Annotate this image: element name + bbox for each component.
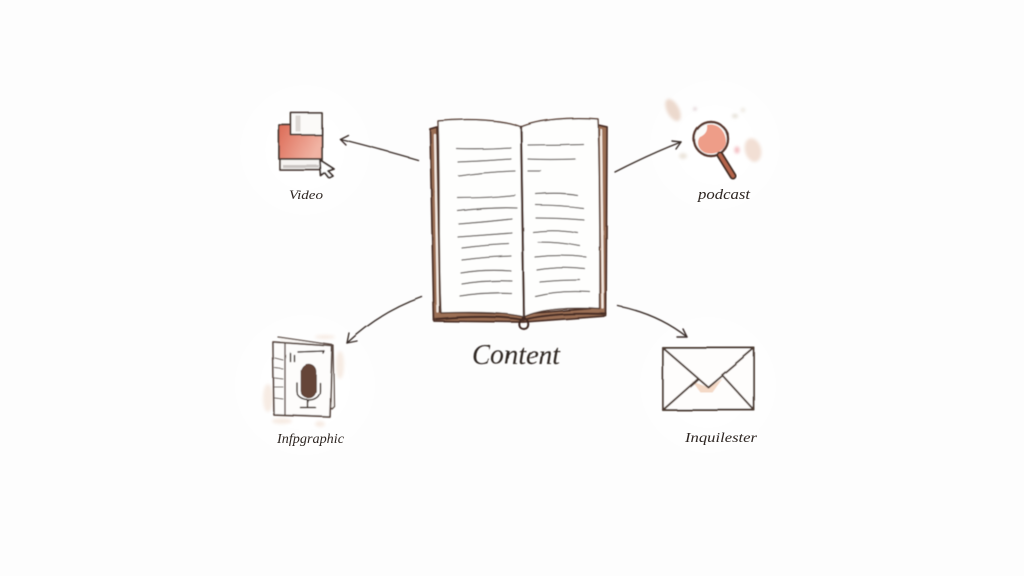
arrow: book to podcast <box>615 141 681 172</box>
arrow: book to newsletter <box>618 306 687 337</box>
label: Infographic: Infpgraphic <box>276 432 345 447</box>
icon: infographic booklet with microphone <box>263 335 344 427</box>
arrow: book to video <box>340 135 418 160</box>
icon: envelope <box>663 348 754 410</box>
book spine <box>521 127 524 318</box>
microphone <box>301 364 316 398</box>
left page text lines <box>457 148 517 296</box>
right page text lines <box>528 144 590 296</box>
icon: video <box>279 113 334 178</box>
central open book <box>430 118 607 329</box>
arrow: book to infographic <box>347 297 422 343</box>
book pages <box>438 118 600 317</box>
book cover <box>430 125 607 322</box>
splashes <box>662 97 764 164</box>
label: podcast: podcast <box>697 187 751 203</box>
cursor <box>320 160 334 178</box>
label: newsletter: Inquilester <box>684 431 758 446</box>
label: Video: Video <box>289 187 324 202</box>
book label: Content: Content <box>472 340 561 371</box>
icon: magnifier with splashes <box>662 97 764 176</box>
